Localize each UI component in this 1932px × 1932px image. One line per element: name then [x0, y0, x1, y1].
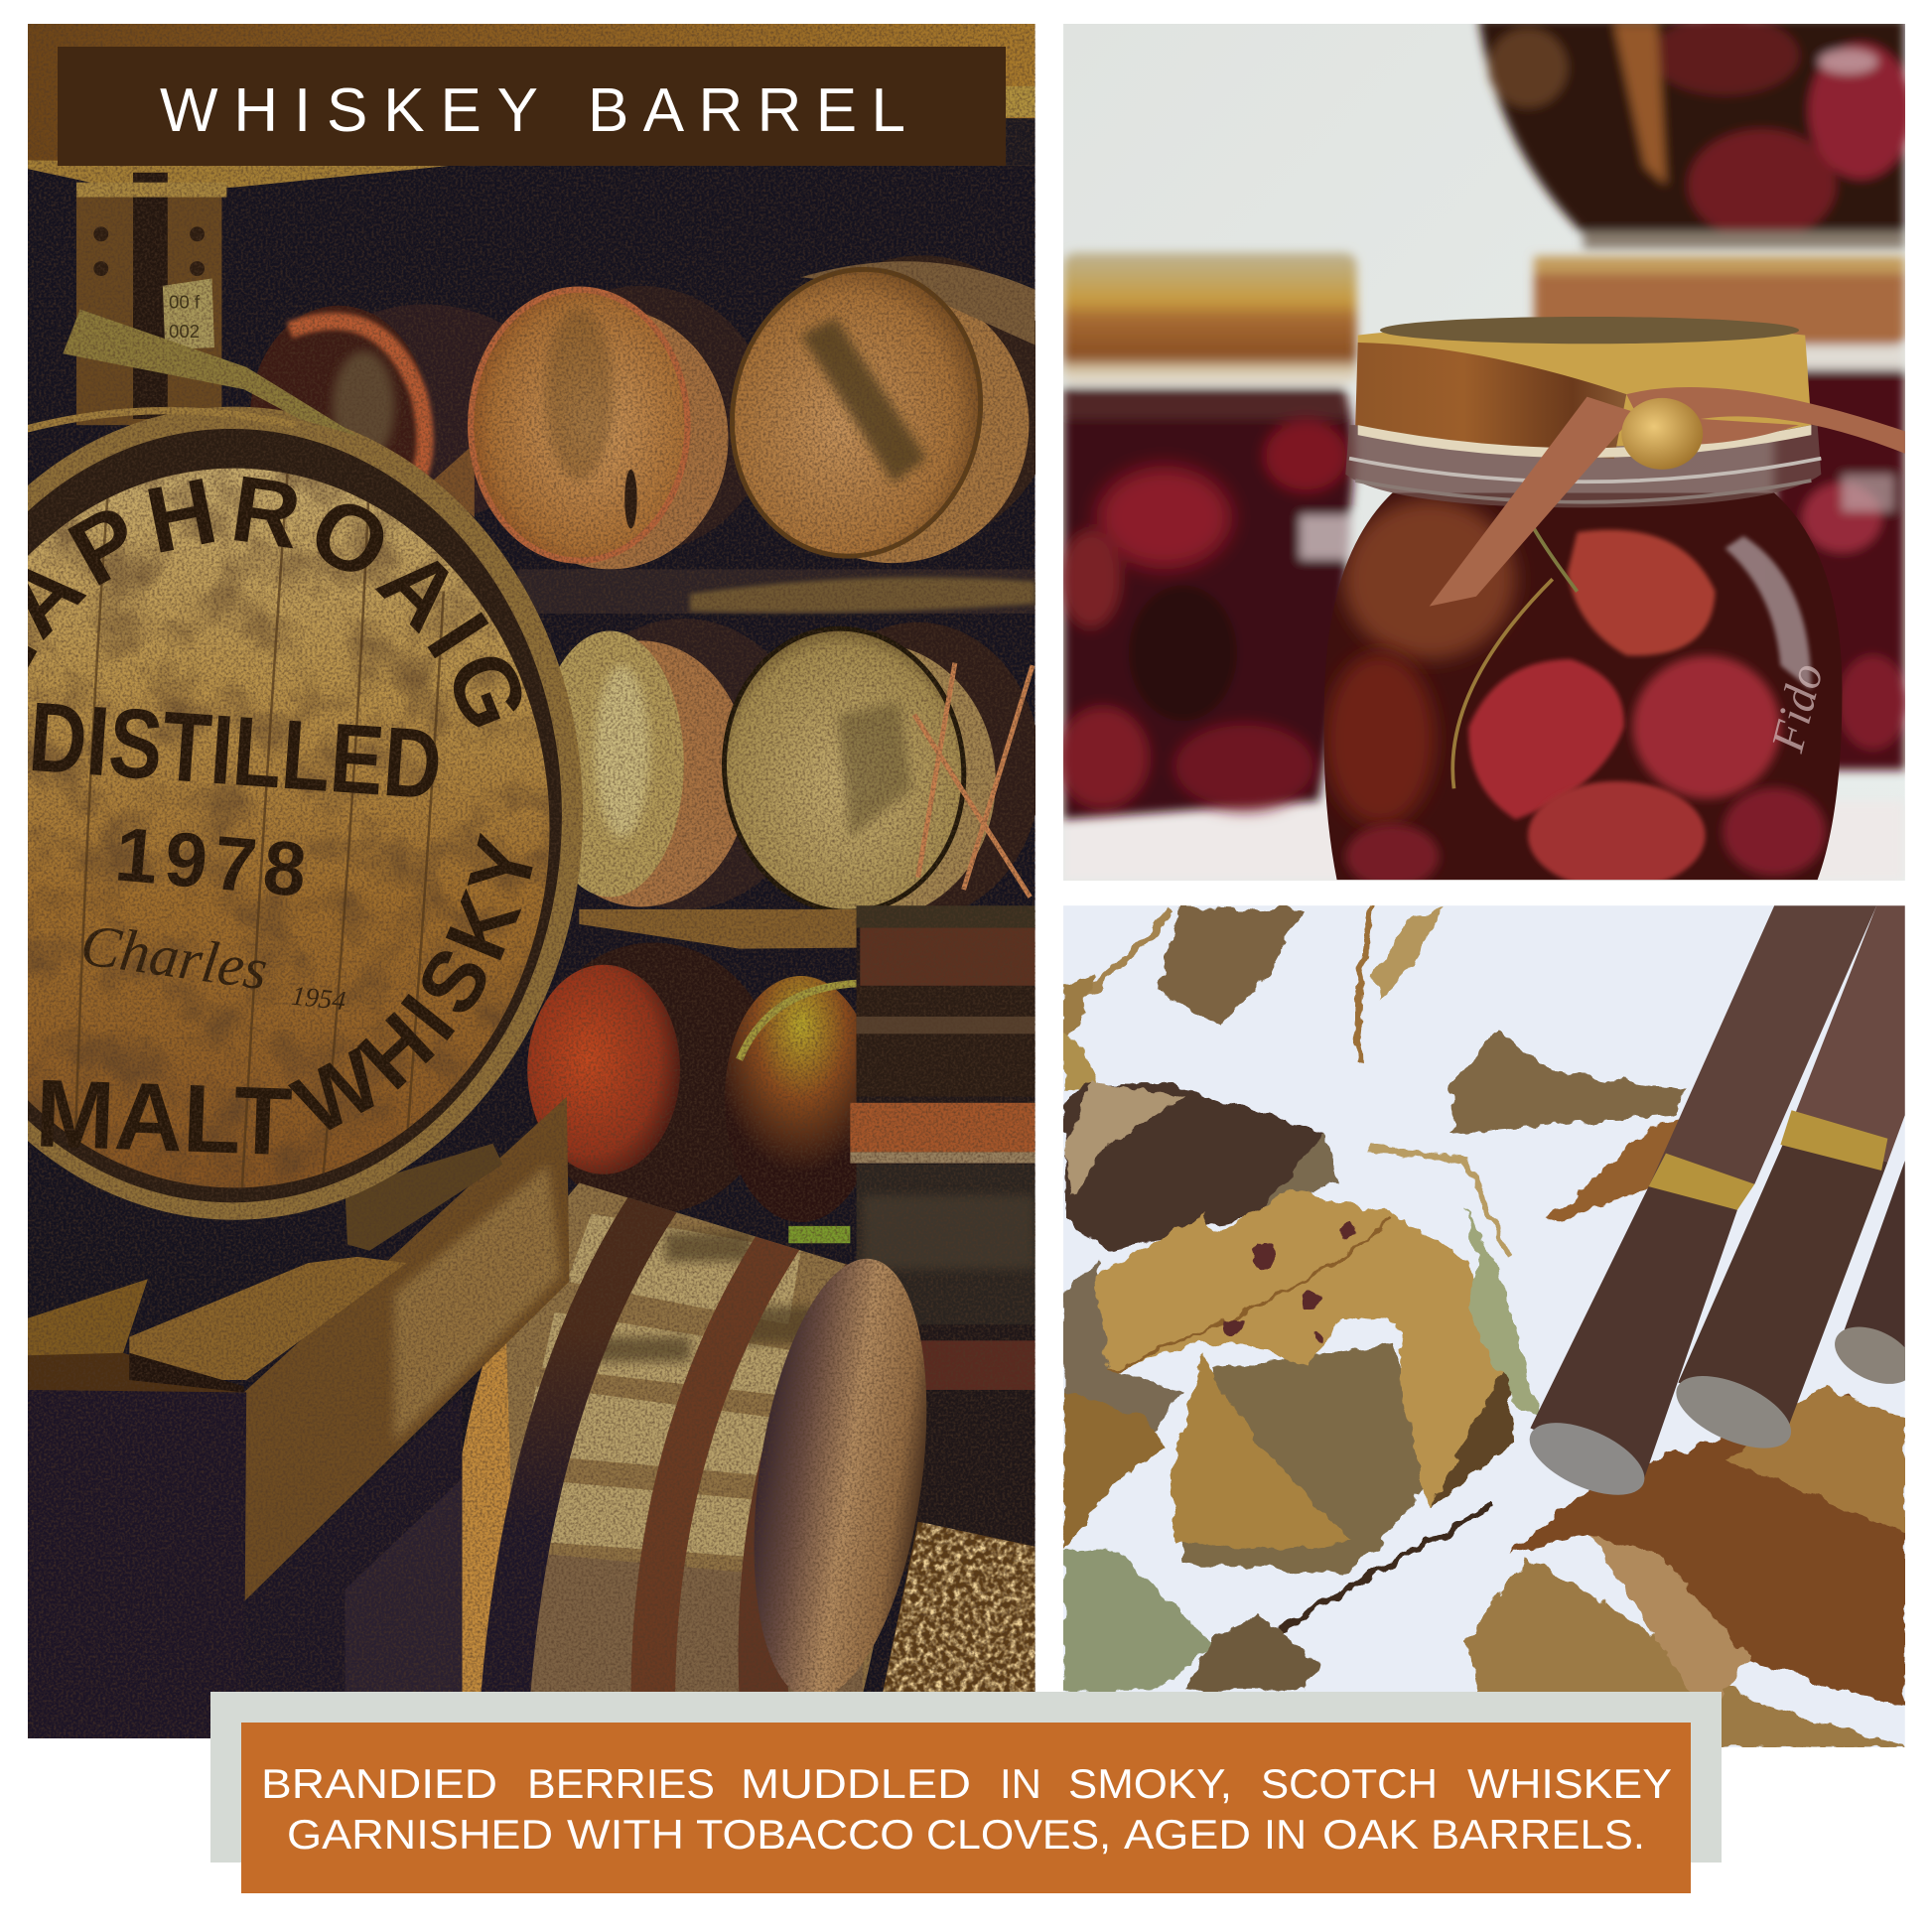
caption line two: WITH: [567, 1811, 684, 1858]
barrel row three: red and gold faces: [527, 942, 878, 1222]
scattered dry leaves: [1063, 905, 1905, 1747]
caption line two: [287, 1811, 1645, 1858]
barrel stencil: malt: MALT: [34, 1058, 294, 1175]
cigar two: [1666, 905, 1905, 1463]
caption line two: IN: [1264, 1811, 1307, 1858]
front jar with cherries: Fido: [1761, 658, 1834, 758]
left jar: [1056, 252, 1356, 819]
upright barrel stack: [850, 905, 1035, 1571]
title banner: [58, 47, 1006, 166]
caption line one: BERRIES: [527, 1760, 715, 1807]
caption line two: BARRELS.: [1431, 1811, 1645, 1858]
barrel D, middle row: [560, 619, 768, 909]
front jar gold lid with ribbon: [1355, 317, 1905, 459]
grain on floor: [881, 1522, 1035, 1701]
caption line one: IN: [1000, 1760, 1041, 1807]
barrel C, top row: [730, 256, 1035, 564]
barrel signature: Charles: [77, 911, 272, 1003]
ceiling beam: [27, 24, 1035, 193]
caption line one: SMOKY,: [1068, 1760, 1232, 1807]
caption line two: AGED: [1124, 1811, 1251, 1858]
tarnished funnel: [63, 310, 358, 436]
title text: BARREL: [588, 76, 905, 145]
caption line two: CLOVES,: [926, 1811, 1111, 1858]
caption line one: [261, 1760, 1672, 1807]
shelf upper: [517, 569, 1035, 614]
barrel B, top row: [471, 286, 770, 569]
steel post with tag: 002: [169, 321, 200, 342]
cigar three: [1826, 1161, 1922, 1396]
barrel A, top row: [250, 304, 502, 518]
steel post with tag: [76, 173, 226, 425]
lying barrel: [463, 1183, 927, 1692]
gold charm: [1621, 398, 1703, 470]
back right jar: [1534, 256, 1907, 770]
panel: whiskey barrel cellar photo: [28, 24, 1035, 1738]
caption line one: SCOTCH: [1261, 1760, 1438, 1807]
front jar with cherries: [1323, 425, 1842, 890]
barrel date: 1954: [290, 981, 347, 1016]
title text: WHISKEY: [160, 76, 538, 145]
caption line one: WHISKEY: [1467, 1760, 1672, 1807]
panel: brandied cherry jars photo: [1056, 16, 1912, 890]
panel: caption backing block: [210, 1692, 1722, 1863]
caption line one: BRANDIED: [261, 1760, 497, 1807]
barrel stencil: whisky: WHISKY: [288, 832, 533, 1130]
caption line two: OAK: [1322, 1811, 1419, 1858]
wooden crate: [27, 1097, 569, 1738]
shelf lower: [579, 909, 1035, 949]
ribbon tail: [1430, 397, 1636, 607]
panel: caption: [241, 1723, 1691, 1893]
title text: [160, 76, 905, 145]
caption line two: GARNISHED: [287, 1811, 553, 1858]
barrel stencil: year: 1978: [112, 811, 310, 913]
steel post with tag: 00 f: [169, 291, 201, 312]
large stencilled barrel head: [28, 407, 583, 1220]
caption line two: TOBACCO: [696, 1811, 914, 1858]
cigar one: [1519, 905, 1876, 1510]
barrel E, middle row: [722, 621, 1035, 909]
panel: tobacco leaves and cigars photo: [1063, 905, 1922, 1756]
crossed sticks: [914, 663, 1033, 897]
barrel stencil: distilled: DISTILLED: [26, 682, 445, 821]
top stacked jar: [1478, 16, 1912, 249]
caption line one: MUDDLED: [741, 1760, 971, 1807]
